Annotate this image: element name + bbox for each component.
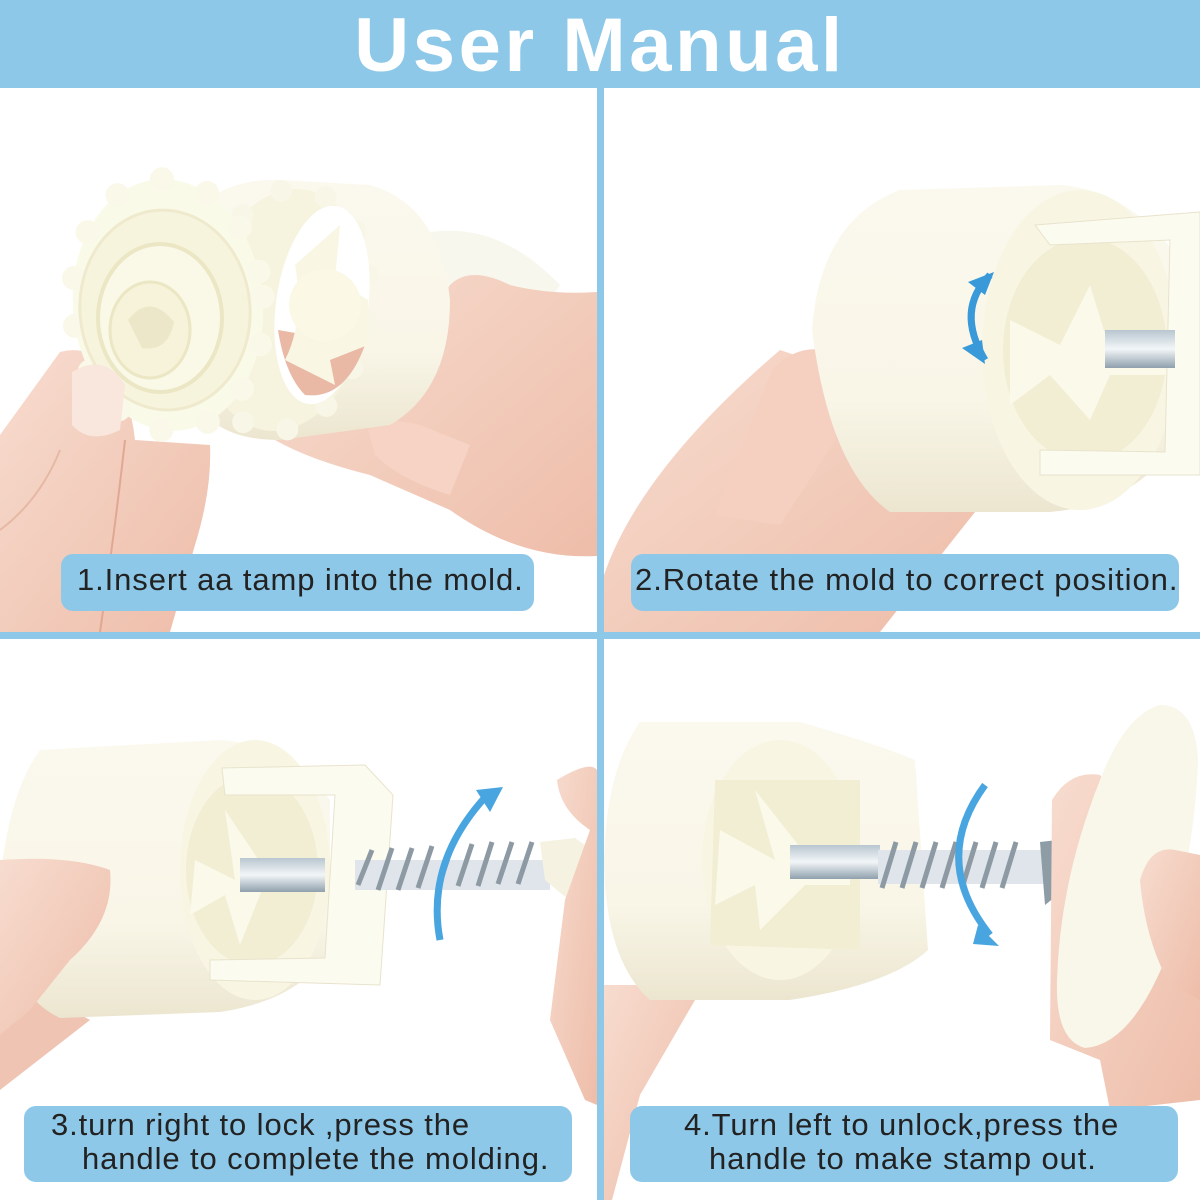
caption 1: 1.Insert aa tamp into the mold. <box>77 562 524 597</box>
caption 3 <box>24 1106 572 1182</box>
panel 4 photo: stamping out with handle <box>604 705 1200 1200</box>
caption 2: 2.Rotate the mold to correct position. <box>635 562 1178 597</box>
caption 3: handle to complete the molding. <box>82 1141 549 1176</box>
panel 3 photo: turning handle right <box>0 740 597 1105</box>
header bar <box>0 0 1200 88</box>
title: User Manual <box>354 3 846 88</box>
caption 4 <box>630 1106 1178 1182</box>
caption 4: 4.Turn left to unlock,press the <box>684 1107 1119 1142</box>
caption 2 <box>631 554 1179 611</box>
caption 4: handle to make stamp out. <box>709 1141 1097 1176</box>
caption 3: 3.turn right to lock ,press the <box>51 1107 470 1142</box>
caption 1 <box>61 554 534 611</box>
panel 1 photo: hands holding mold and rose stamp <box>0 171 597 632</box>
panel 2 photo: hand rotating mold <box>604 185 1200 632</box>
